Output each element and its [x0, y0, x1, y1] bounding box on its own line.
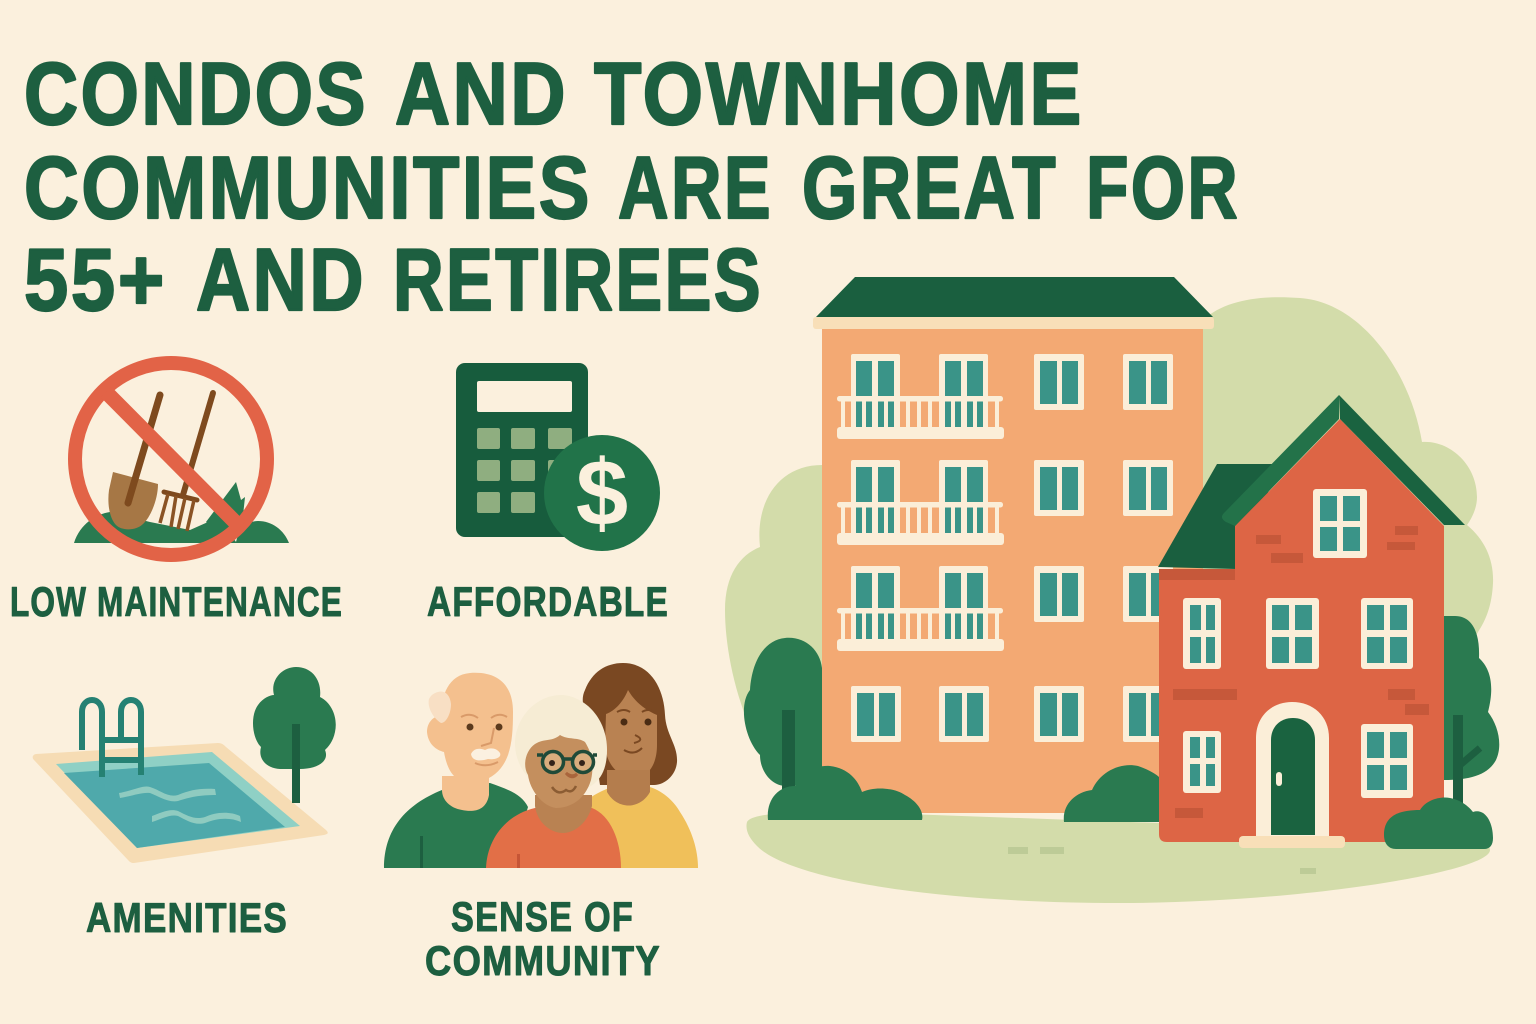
title [24, 44, 1240, 329]
right bush [1384, 798, 1493, 849]
panel: amenities [33, 667, 336, 941]
label: affordable: AFFORDABLE [427, 578, 669, 625]
left roof [1158, 464, 1280, 569]
title: TOWNHOME [594, 44, 1084, 143]
label: low maintenance: LOW MAINTENANCE [10, 578, 343, 625]
left tree [744, 638, 822, 795]
ground [746, 812, 1490, 903]
right tree [1444, 616, 1499, 815]
older man [384, 673, 528, 868]
wall [1159, 419, 1444, 842]
icon: calculator and dollar coin [456, 363, 660, 551]
background foliage [725, 297, 1493, 800]
red brick house [1158, 395, 1465, 848]
title: FOR [1086, 138, 1240, 237]
icon: swimming pool [33, 700, 328, 863]
windows [851, 354, 1173, 742]
title: ARE [618, 138, 773, 237]
ground stones [1008, 847, 1316, 874]
panel: sense of community [384, 663, 698, 984]
bushes [768, 765, 1162, 822]
title: GREAT [802, 138, 1058, 237]
label: sense of community: SENSE OF [451, 893, 634, 940]
label: sense of community [425, 893, 661, 984]
title: 55+ [24, 230, 167, 329]
icon: crossed-out garden tools [74, 363, 289, 555]
label: sense of community: COMMUNITY [425, 937, 661, 984]
balcony windows [837, 354, 1004, 651]
gable roof right [1339, 395, 1465, 525]
roof [816, 277, 1213, 317]
second floor windows [1183, 598, 1413, 669]
older woman [486, 695, 621, 868]
label: amenities: AMENITIES [86, 894, 288, 941]
wall [822, 329, 1203, 813]
apartment building [813, 277, 1214, 813]
title: RETIREES [393, 230, 763, 329]
title: AND [196, 230, 366, 329]
gable roof left [1222, 395, 1339, 526]
illustration: buildings scene [725, 277, 1499, 903]
bricks [1159, 526, 1429, 818]
panel: affordable [427, 363, 669, 625]
title: AND [395, 44, 568, 143]
door [1239, 702, 1345, 848]
young woman [579, 663, 698, 868]
title: CONDOS [24, 44, 368, 143]
icon: three people [384, 663, 698, 868]
icon: calculator and dollar coin: $ [576, 440, 628, 545]
first floor windows [1183, 724, 1413, 798]
icon: tree [253, 667, 336, 803]
cornice [813, 317, 1214, 329]
attic window [1313, 489, 1367, 558]
panel: low maintenance [10, 363, 343, 625]
title: COMMUNITIES [24, 138, 592, 237]
